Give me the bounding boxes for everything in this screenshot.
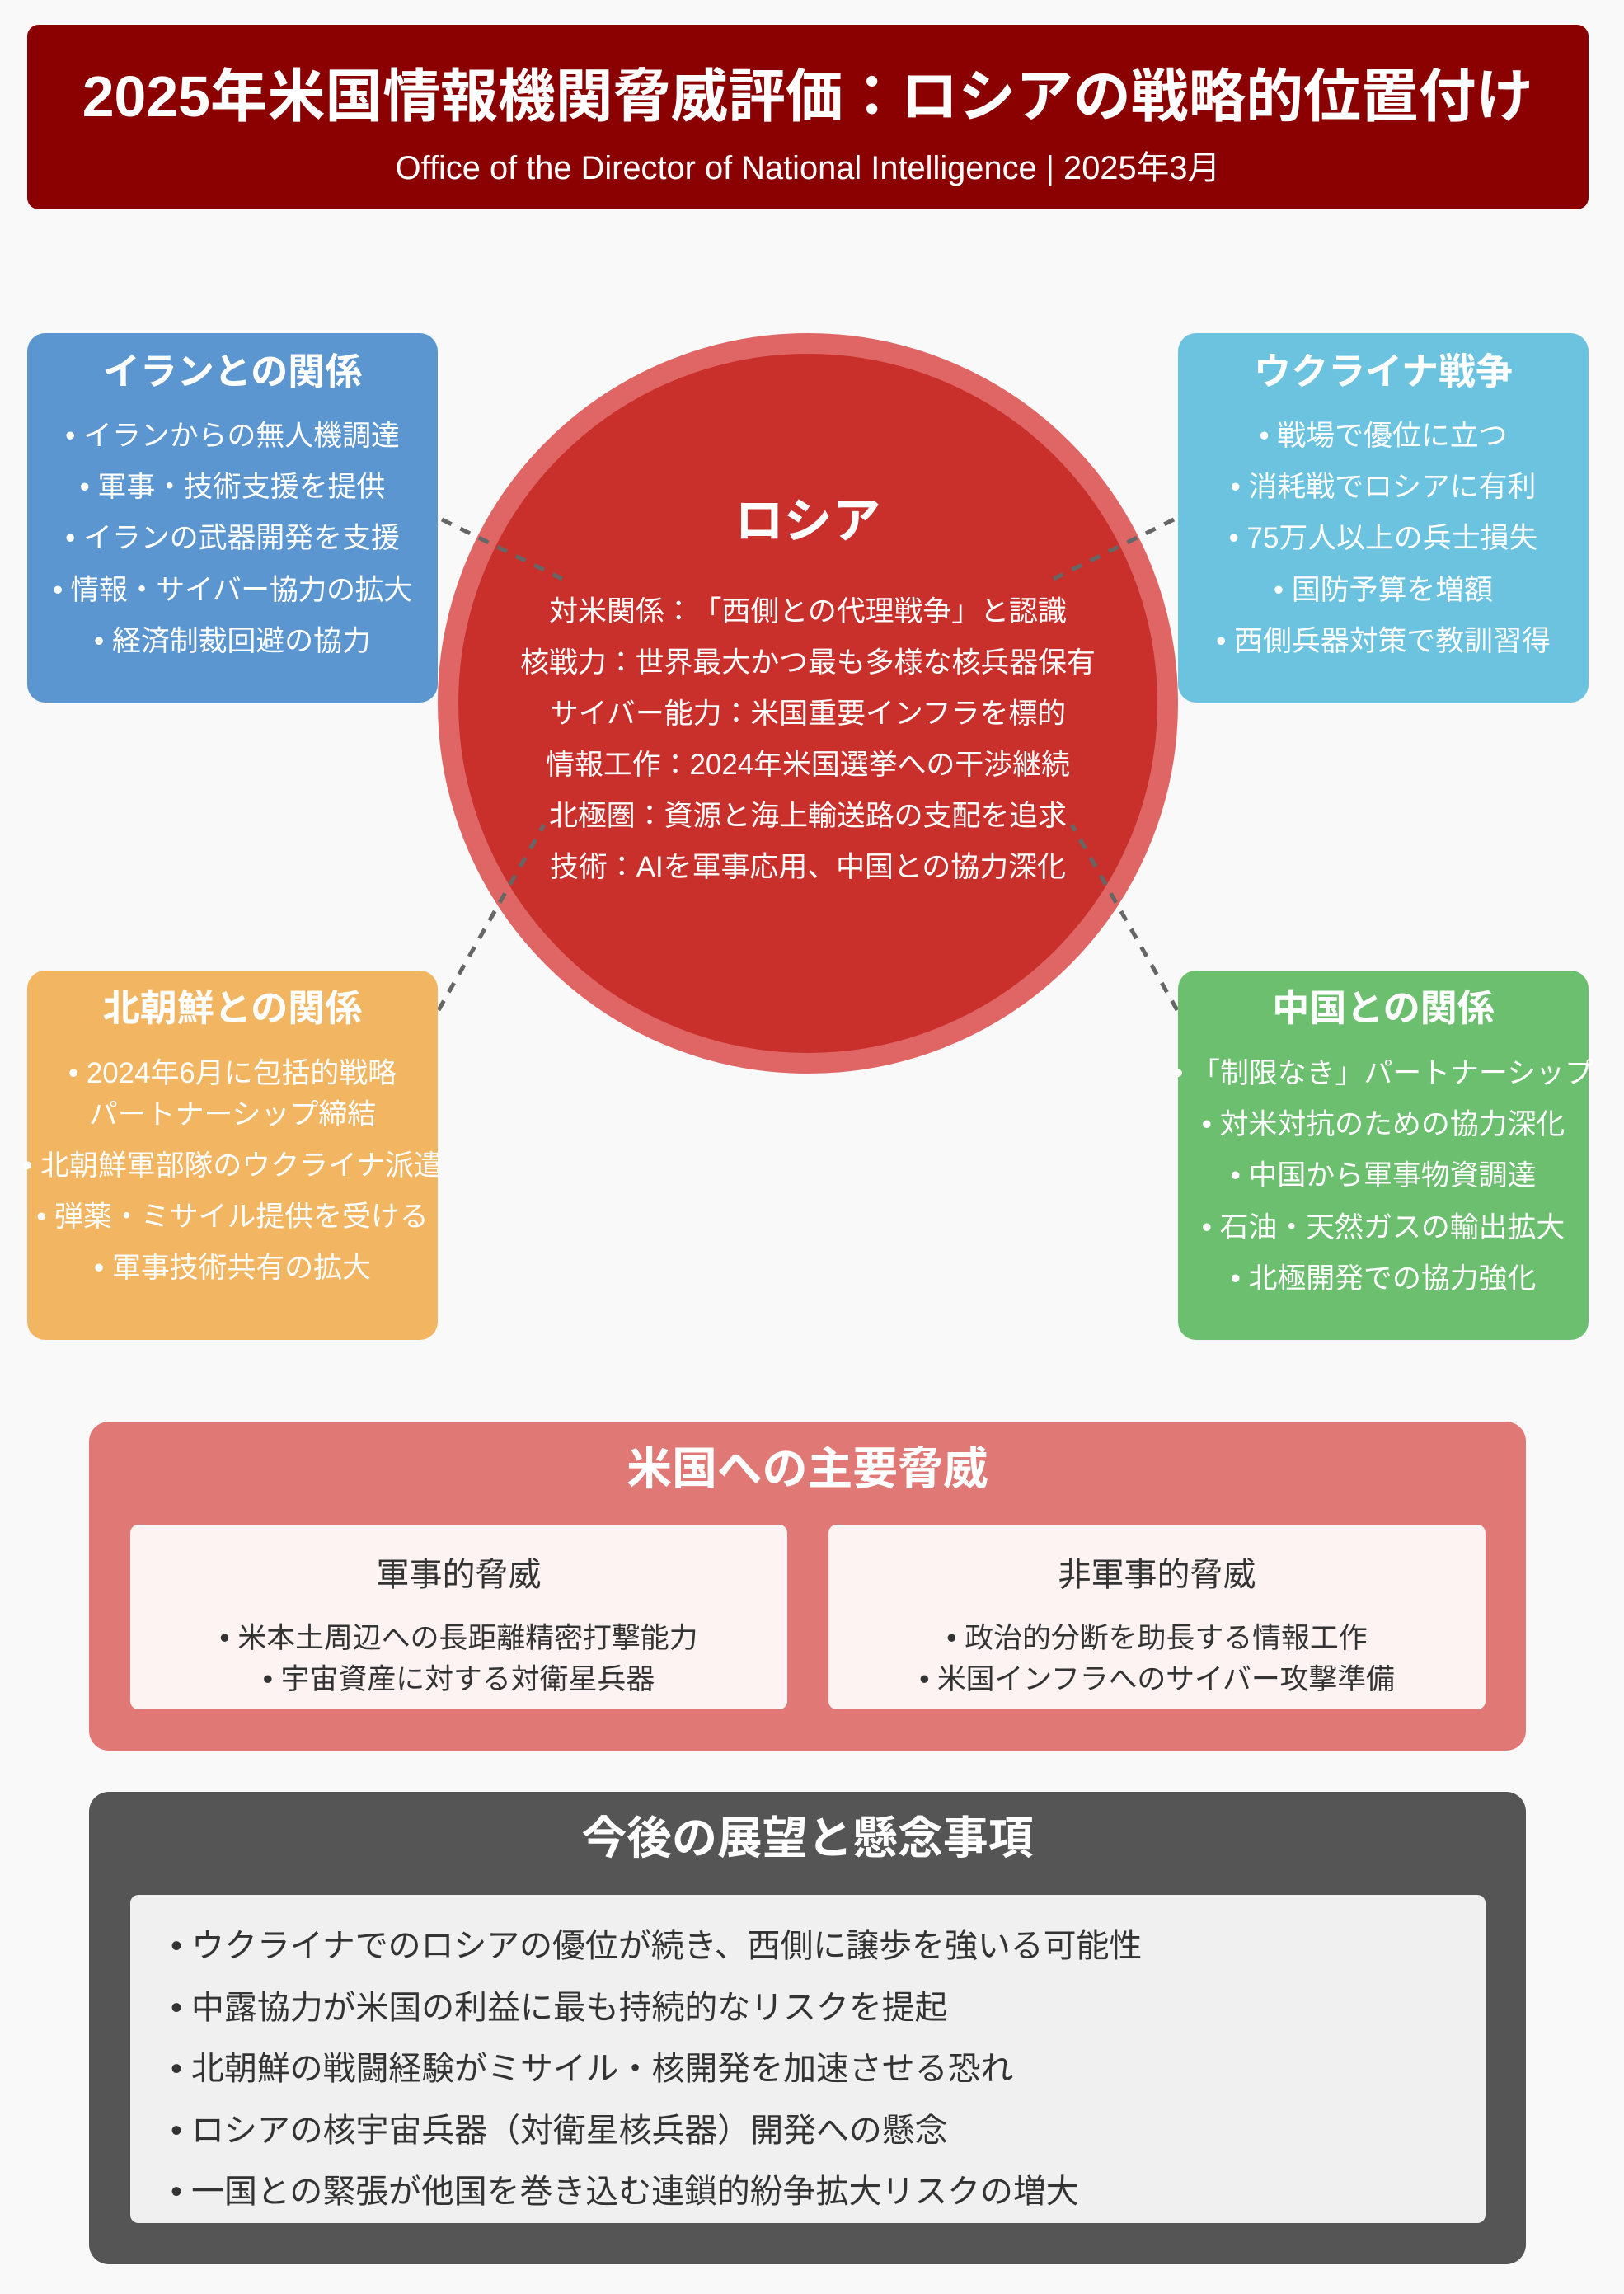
heading: Ukraine: ウクライナ戦争	[1254, 350, 1513, 393]
item: • 政治的分断を助長する情報工作	[946, 1622, 1368, 1654]
item: • 2024年6月に包括的戦略	[68, 1057, 397, 1089]
item: • 中国から軍事物資調達	[1231, 1159, 1536, 1192]
item: • 戦場で優位に立つ	[1259, 420, 1508, 452]
item: • 石油・天然ガスの輸出拡大	[1202, 1211, 1565, 1243]
item: nuclear: 核戦力：世界最大かつ最も多様な核兵器保有	[520, 646, 1096, 679]
panel: Ukraine war	[1178, 333, 1589, 703]
item: • 米国インフラへのサイバー攻撃準備	[919, 1663, 1395, 1695]
dashed connectors	[438, 518, 1178, 1011]
item: • 西側兵器対策で教訓習得	[1216, 625, 1551, 657]
item: • 一国との緊張が他国を巻き込む連鎖的紛争拡大リスクの増大	[171, 2174, 1079, 2210]
panel: major threats to the US	[89, 1422, 1526, 1751]
panel: North Korea	[27, 971, 438, 1340]
item: • ウクライナでのロシアの優位が続き、西側に譲歩を強いる可能性	[171, 1928, 1142, 1964]
sub-panel: non-military threats	[828, 1525, 1486, 1709]
item: • 「制限なき」パートナーシップ	[1173, 1057, 1593, 1089]
heading: Iran: イランとの関係	[103, 350, 362, 393]
item: cyber: サイバー能力：米国重要インフラを標的	[550, 698, 1066, 730]
item: relations with US: 対米関係：「西側との代理戦争」と認識	[549, 595, 1067, 628]
panel: Iran	[27, 333, 438, 703]
item: • 消耗戦でロシアに有利	[1231, 471, 1536, 503]
item: • 中露協力が米国の利益に最も持続的なリスクを提起	[171, 1990, 948, 2026]
item: • 米本土周辺への長距離精密打撃能力	[219, 1622, 698, 1654]
item: • 経済制裁回避の協力	[94, 625, 371, 657]
item: technology: 技術：AIを軍事応用、中国との協力深化	[550, 851, 1066, 883]
title: 2025年米国情報機関脅威評価：ロシアの戦略的位置付け	[82, 64, 1533, 129]
heading: threats: 米国への主要脅威	[627, 1443, 988, 1494]
item: • 北朝鮮の戦闘経験がミサイル・核開発を加速させる恐れ	[171, 2051, 1013, 2087]
list box	[130, 1895, 1486, 2223]
central circle: Russia	[438, 333, 1178, 1074]
sub-heading: 非軍事的脅威	[1058, 1557, 1256, 1593]
item: • イランの武器開発を支援	[65, 522, 400, 554]
item: • 北朝鮮軍部隊のウクライナ派遣	[22, 1149, 443, 1182]
item: • ロシアの核宇宙兵器（対衛星核兵器）開発への懸念	[171, 2113, 948, 2149]
heading: Russia: ロシア	[735, 494, 881, 548]
sub-heading: 軍事的脅威	[376, 1557, 541, 1593]
item: • 国防予算を増額	[1274, 574, 1493, 606]
item: • 弾薬・ミサイル提供を受ける	[36, 1201, 429, 1233]
item: • 対米対抗のための協力深化	[1202, 1108, 1565, 1140]
item: Arctic: 北極圏：資源と海上輸送路の支配を追求	[549, 800, 1067, 832]
panel: outlook and concerns	[89, 1792, 1526, 2264]
heading: China: 中国との関係	[1272, 987, 1495, 1029]
item: • 75万人以上の兵士損失	[1229, 522, 1537, 554]
item: • 宇宙資産に対する対衛星兵器	[263, 1663, 655, 1695]
heading: North Korea: 北朝鮮との関係	[103, 987, 362, 1029]
item: • 軍事技術共有の拡大	[94, 1252, 371, 1284]
item: • 軍事・技術支援を提供	[80, 471, 385, 503]
item continuation: パートナーシップ締結	[89, 1098, 376, 1131]
item: • 情報・サイバー協力の拡大	[53, 574, 412, 606]
item: • 北極開発での協力強化	[1231, 1262, 1536, 1295]
panel: China	[1178, 971, 1589, 1340]
title banner	[27, 25, 1589, 209]
subtitle: Office of the Director of National Intelligence | 2025年3月	[396, 150, 1220, 186]
heading: outlook: 今後の展望と懸念事項	[582, 1812, 1033, 1864]
item: • イランからの無人機調達	[65, 420, 400, 452]
sub-panel: military threats	[130, 1525, 787, 1709]
item: information operations: 情報工作：2024年米国選挙への干渉継続	[546, 749, 1070, 781]
